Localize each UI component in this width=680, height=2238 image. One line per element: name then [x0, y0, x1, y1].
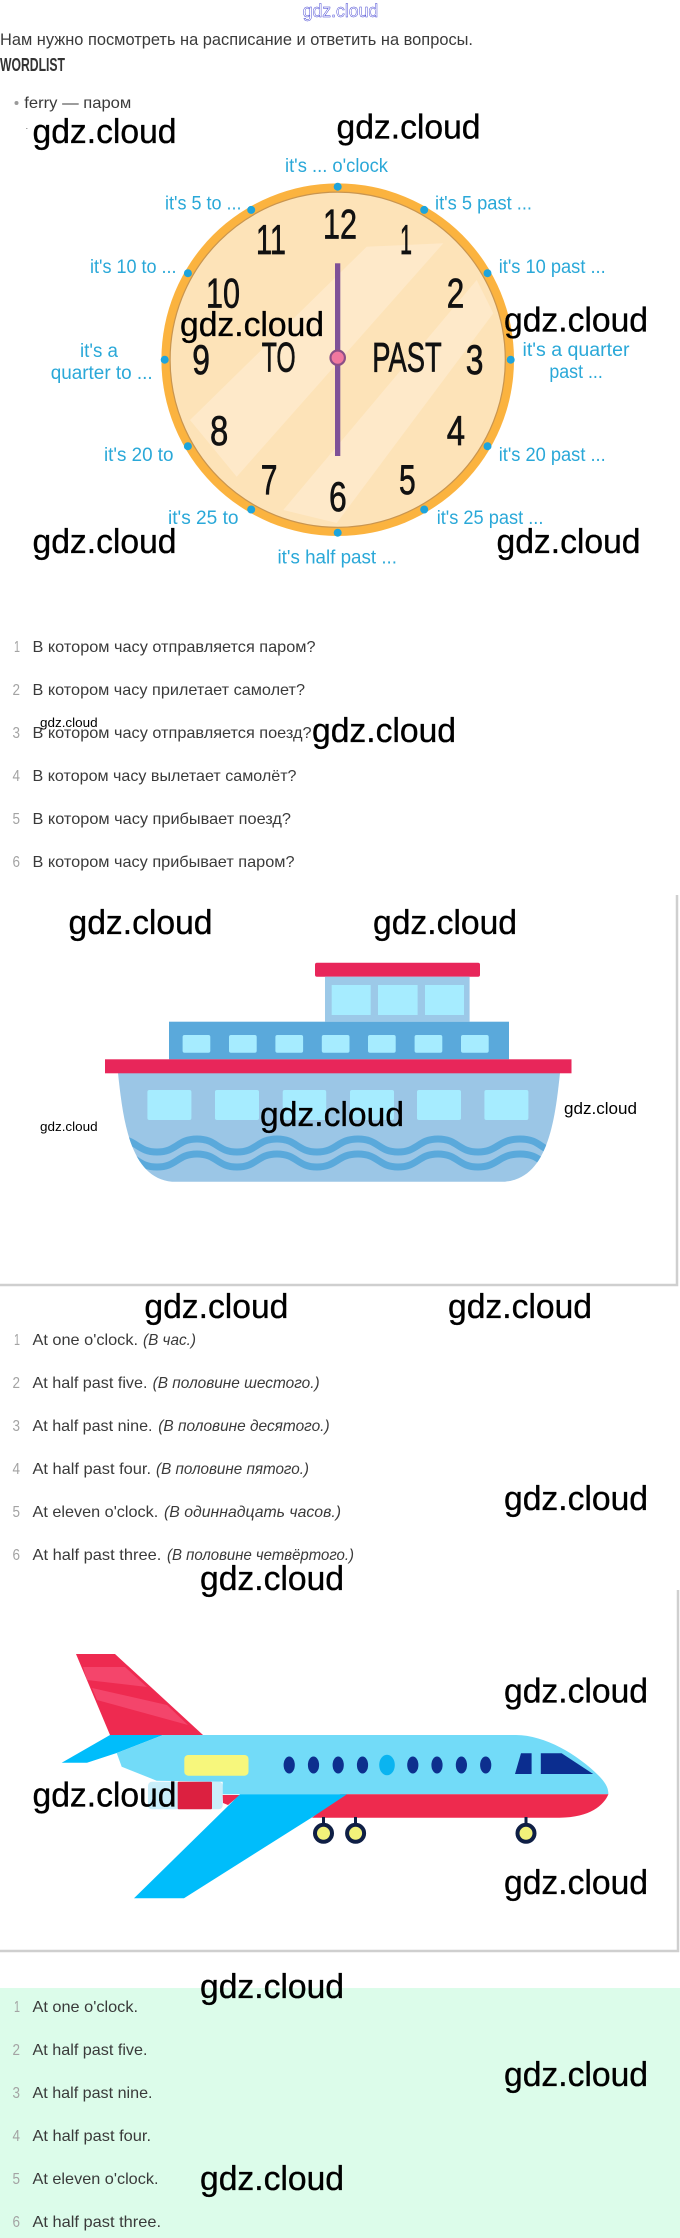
watermark: gdz.cloud	[180, 306, 324, 344]
watermark: gdz.cloud	[200, 2160, 344, 2198]
clock centre pin	[330, 350, 345, 365]
answers list: 3	[12, 2085, 20, 2102]
time phrase labels: it's 5 past ...	[435, 194, 532, 215]
answers with translation: 2	[12, 1375, 20, 1392]
questions list: 6	[12, 854, 20, 871]
answers with translation: (В половине шестого.)	[153, 1375, 320, 1392]
questions list: В котором часу прилетает самолет?	[32, 682, 305, 699]
clock numerals: 3	[466, 336, 483, 383]
main deck	[105, 1059, 572, 1073]
wordlist items: ferry — паром	[24, 95, 131, 112]
answers list: 6	[12, 2214, 20, 2231]
questions list: В котором часу отправляется паром?	[32, 639, 316, 656]
watermark: gdz.cloud	[32, 113, 176, 151]
time phrase labels: it's 25 to	[168, 508, 238, 529]
middle deck windows	[183, 1035, 489, 1053]
watermark small: gdz.cloud	[40, 1119, 98, 1134]
watermark: gdz.cloud	[504, 302, 648, 340]
questions list: В котором часу отправляется поезд?	[32, 725, 312, 742]
questions list: 3	[12, 725, 20, 742]
label: past: PAST	[372, 334, 442, 381]
cockpit windows	[515, 1753, 593, 1774]
watermark: gdz.cloud	[373, 904, 517, 942]
clock numerals: 8	[210, 407, 228, 454]
plane tail fin	[76, 1654, 203, 1735]
watermark: gdz.cloud	[32, 1777, 176, 1815]
time phrase labels: it's 10 past ...	[499, 257, 606, 278]
panel: answers highlight	[0, 1988, 680, 2238]
answers list: 5	[12, 2171, 20, 2188]
answers with translation: (В половине пятого.)	[156, 1461, 309, 1478]
answers with translation: 6	[12, 1547, 20, 1564]
clock numerals: 10	[206, 270, 240, 317]
cargo hatch	[184, 1755, 248, 1776]
wordlist items	[14, 96, 130, 129]
watermark: gdz.cloud	[200, 1560, 344, 1598]
hull waves	[117, 1139, 560, 1167]
label: to: TO	[262, 334, 296, 381]
answers with translation: 3	[12, 1418, 20, 1435]
middle deck	[169, 1022, 509, 1059]
clock hands	[335, 263, 340, 456]
time phrase labels: it's 25 past ...	[437, 508, 543, 529]
time phrase labels: it's half past ...	[278, 548, 397, 568]
answers with translation: 1	[14, 1332, 20, 1349]
watermark: gdz.cloud	[496, 523, 640, 561]
door	[379, 1755, 395, 1775]
questions list: 1	[14, 639, 20, 656]
questions list: В котором часу прибывает паром?	[32, 854, 295, 871]
watermark: gdz.cloud	[504, 1673, 648, 1711]
tail highlights	[83, 1667, 188, 1725]
illustration: plane	[62, 1654, 608, 1898]
cabin windows	[332, 985, 464, 1015]
watermark: gdz.cloud	[68, 904, 212, 942]
answers list: 2	[12, 2042, 20, 2059]
clock numerals: 5	[399, 456, 416, 503]
watermark: gdz.cloud	[448, 1288, 592, 1326]
face highlights	[190, 243, 493, 523]
clock numerals: 11	[256, 216, 286, 263]
hull windows	[147, 1090, 528, 1120]
watermark medium: gdz.cloud	[564, 1099, 637, 1118]
landing gear	[315, 1817, 534, 1842]
tail stabilizer	[62, 1735, 163, 1763]
watermark: gdz.cloud	[32, 523, 176, 561]
watermark: top outlined: gdz.cloud	[303, 1, 378, 21]
clock numerals: 12	[323, 200, 357, 247]
wing	[134, 1794, 347, 1898]
answers list: At half past five.	[32, 2042, 148, 2059]
time phrase labels: quarter to ...	[51, 363, 153, 384]
questions list: В котором часу вылетает самолёт?	[32, 768, 297, 785]
questions list: 2	[12, 682, 20, 699]
time phrase labels: past ...	[549, 362, 603, 383]
passenger windows	[284, 1756, 491, 1774]
clock numerals	[192, 200, 483, 520]
answers list: 1	[14, 1999, 20, 2016]
engine pod	[148, 1782, 223, 1809]
clock numerals: 6	[329, 473, 347, 520]
heading: wordlist: WORDLIST	[0, 55, 65, 75]
answers with translation: (В одиннадцать часов.)	[164, 1504, 341, 1521]
minute dots	[161, 183, 515, 537]
answers with translation: At half past five.	[32, 1375, 148, 1392]
watermark small: gdz.cloud	[40, 715, 98, 730]
watermark: gdz.cloud	[504, 2056, 648, 2094]
watermark: gdz.cloud	[336, 108, 480, 146]
answers with translation: (В половине десятого.)	[158, 1418, 330, 1435]
clock face	[170, 192, 505, 527]
time phrase labels	[51, 156, 630, 568]
answers list: At one o'clock.	[32, 1999, 138, 2016]
clock numerals: 9	[192, 336, 210, 383]
answers with translation: At half past nine.	[32, 1418, 152, 1435]
ferry top roof	[315, 963, 480, 977]
clock ring	[161, 183, 514, 536]
answers with translation: 4	[12, 1461, 20, 1478]
answers with translation: At eleven o'clock.	[32, 1504, 158, 1521]
watermark: gdz.cloud	[504, 1864, 648, 1902]
clock numerals: 4	[447, 407, 465, 454]
time phrase labels: it's 10 to ...	[90, 257, 176, 278]
ferry cabin	[325, 977, 470, 1022]
wordlist items: leave — отправляться, уезжать	[25, 127, 253, 144]
answers with translation: At one o'clock.	[32, 1332, 138, 1349]
watermark: gdz.cloud	[144, 1288, 288, 1326]
answers list: 4	[12, 2128, 20, 2145]
plane fuselage	[117, 1735, 608, 1794]
answers with translation	[12, 1332, 354, 1564]
questions list: 4	[12, 768, 20, 785]
watermark: gdz.cloud	[200, 1968, 344, 2006]
time phrase labels: it's a quarter	[522, 340, 630, 361]
intro text: Нам нужно посмотреть на расписание и ответить на вопросы.	[0, 30, 473, 49]
clock numerals: 1	[400, 216, 412, 263]
answers with translation: 5	[12, 1504, 20, 1521]
panel: plane image frame	[0, 1590, 678, 1951]
clock numerals: 2	[447, 270, 464, 317]
answers with translation: At half past three.	[32, 1547, 161, 1564]
time phrase labels: it's 5 to ...	[165, 194, 242, 215]
engine intake	[178, 1782, 212, 1809]
answers list: At eleven o'clock.	[32, 2171, 158, 2188]
time phrase labels: it's a	[80, 341, 118, 362]
time phrase labels: it's 20 to	[104, 445, 174, 466]
answers list: At half past nine.	[32, 2085, 152, 2102]
questions list: 5	[12, 811, 20, 828]
clock numerals: 7	[261, 456, 277, 503]
time phrase labels: it's ... o'clock	[285, 156, 388, 177]
panel: ferry image frame	[0, 895, 677, 1285]
illustration: ferry	[105, 963, 572, 1182]
questions list: В котором часу прибывает поезд?	[32, 811, 291, 828]
ferry hull	[118, 1073, 560, 1182]
watermark: gdz.cloud	[504, 1480, 648, 1518]
answers list: At half past four.	[32, 2128, 151, 2145]
answers list: At half past three.	[32, 2214, 161, 2231]
answers list	[12, 1999, 161, 2231]
answers with translation: (В половине четвёртого.)	[167, 1547, 354, 1564]
plane belly	[223, 1795, 240, 1805]
time phrase labels: it's 20 past ...	[499, 445, 606, 466]
plane lower hull	[312, 1794, 608, 1818]
watermark: gdz.cloud	[260, 1096, 404, 1134]
clock diagram	[51, 156, 630, 568]
questions list	[12, 639, 316, 871]
watermark: gdz.cloud	[312, 712, 456, 750]
answers with translation: (В час.)	[143, 1332, 196, 1349]
answers with translation: At half past four.	[32, 1461, 151, 1478]
